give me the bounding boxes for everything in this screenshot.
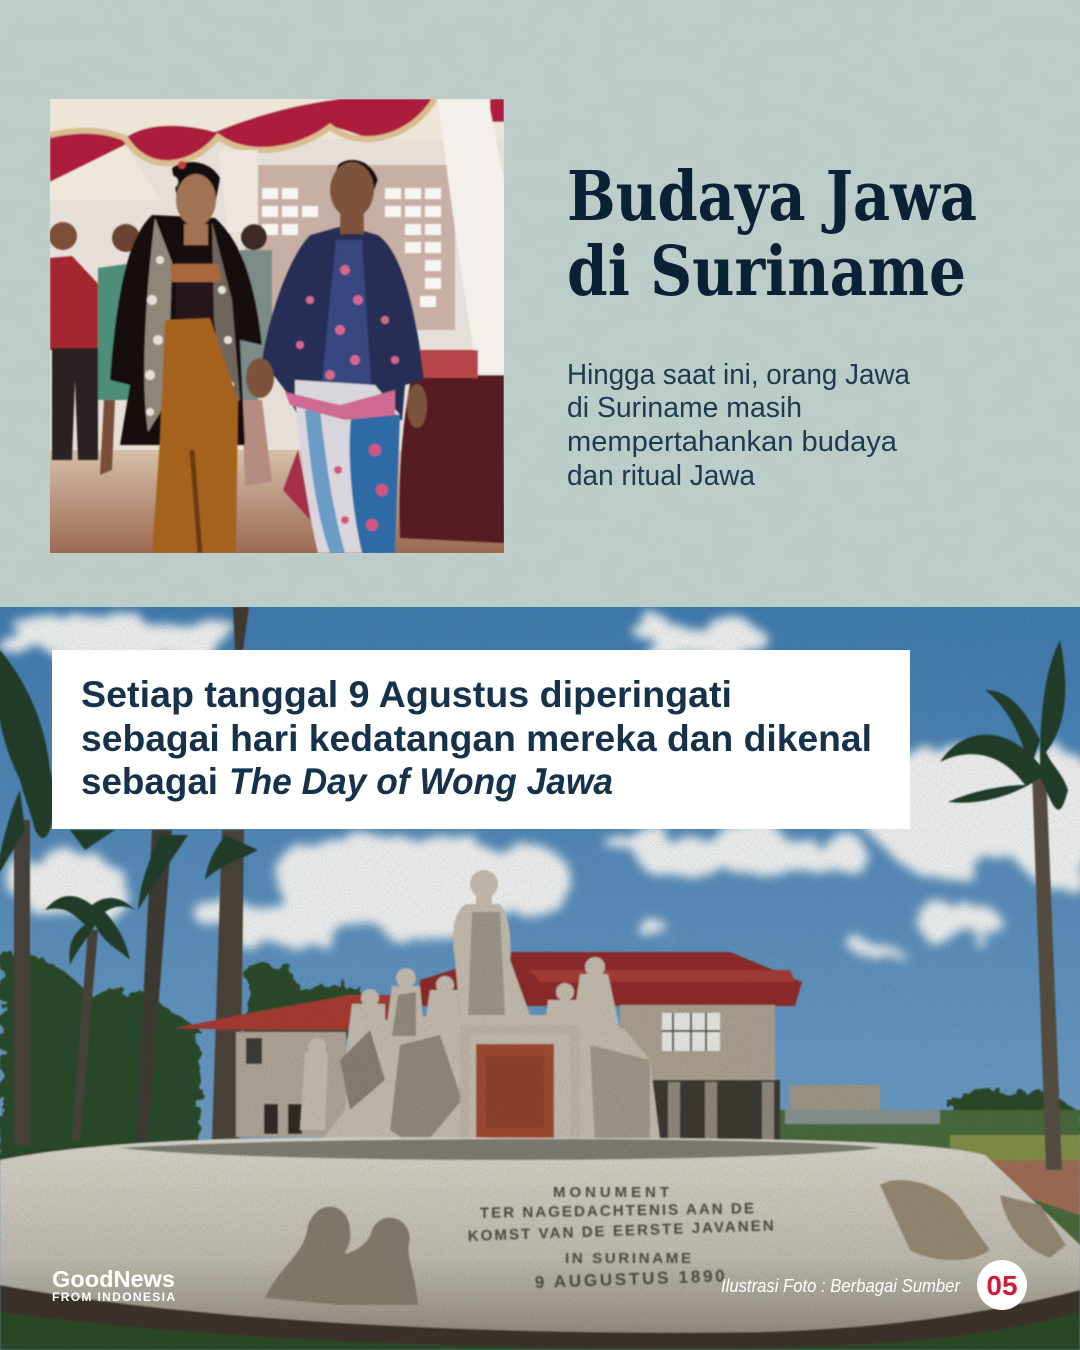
monument inscription: TER NAGEDACHTENIS AAN DE (480, 1200, 754, 1222)
monument inscription: MONUMENT (553, 1184, 669, 1201)
monument inscription: IN SURINAME (565, 1250, 691, 1267)
monument inscription (468, 1184, 774, 1292)
callout: white text box: The Day of Wong Jawa (229, 761, 613, 802)
title: Budaya Jawa (567, 157, 977, 237)
intro text block: di Suriname masih (567, 392, 802, 424)
logo: GoodNews from Indonesia: GoodNews (52, 1266, 175, 1292)
intro text block: dan ritual Jawa (567, 460, 756, 492)
callout: white text box: Setiap tanggal 9 Agustus diperingati (81, 674, 732, 715)
title: di Suriname (567, 232, 966, 312)
page number badge (977, 1260, 1027, 1310)
callout: white text box: sebagai (81, 761, 218, 802)
callout: white text box: sebagai hari kedatangan mereka dan dikenal (81, 718, 872, 759)
callout: white text box (52, 650, 910, 829)
intro text block: mempertahankan budaya (567, 426, 898, 458)
logo: GoodNews from Indonesia (52, 1266, 175, 1304)
monument inscription: 9 AUGUSTUS 1890 (534, 1266, 725, 1292)
page number badge: 05 (986, 1270, 1018, 1301)
intro text block (567, 359, 911, 492)
photo credit: Ilustrasi Foto : Berbagai Sumber (721, 1276, 961, 1296)
background: paper texture (0, 0, 1080, 607)
monument inscription: KOMST VAN DE EERSTE JAVANEN (468, 1217, 774, 1245)
photo: two women in Javanese dress (49, 99, 504, 553)
intro text block: Hingga saat ini, orang Jawa (567, 359, 911, 391)
logo: GoodNews from Indonesia: FROM INDONESIA (52, 1290, 175, 1304)
title (567, 157, 977, 312)
photo: monument in Suriname (0, 607, 1080, 1350)
